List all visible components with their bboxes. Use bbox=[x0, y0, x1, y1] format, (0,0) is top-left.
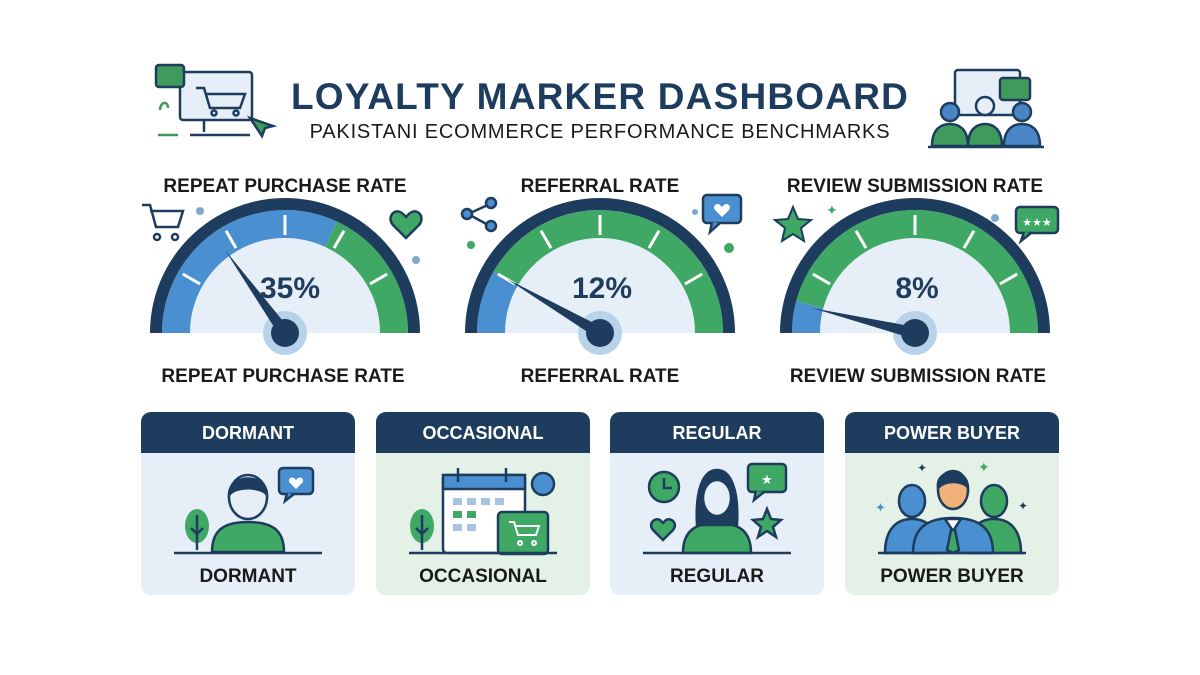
gauge 3: review submission rate: 8% bbox=[895, 272, 939, 305]
icon: star bbox=[775, 207, 811, 241]
gauge 2: referral rate: REFERRAL RATE bbox=[521, 176, 679, 197]
card: occasional: OCCASIONAL bbox=[419, 566, 547, 587]
gauge 1: repeat purchase rate: 35% bbox=[260, 272, 320, 305]
card: occasional: OCCASIONAL bbox=[422, 423, 544, 443]
card: power buyer: ✦ bbox=[875, 500, 886, 515]
icon: group with leader bbox=[878, 471, 1026, 553]
gauge 2: referral rate: 12% bbox=[572, 272, 632, 305]
card: regular: ★ bbox=[761, 472, 773, 487]
gauge 1: repeat purchase rate: REPEAT PURCHASE RATE bbox=[163, 176, 407, 197]
gauge 2: referral rate bbox=[462, 176, 741, 387]
icon: community people (header right) bbox=[928, 70, 1044, 147]
title: LOYALTY MARKER DASHBOARD bbox=[291, 76, 909, 117]
icon: share bbox=[462, 198, 496, 231]
gauge 3: review submission rate: ✦ bbox=[826, 202, 838, 218]
gauge 1: repeat purchase rate: REPEAT PURCHASE RATE bbox=[161, 366, 405, 387]
icon: calendar with cart bbox=[409, 468, 557, 554]
card: occasional bbox=[376, 412, 590, 595]
card: power buyer: ✦ bbox=[917, 461, 927, 475]
card: power buyer: ✦ bbox=[1018, 499, 1028, 513]
card: dormant: DORMANT bbox=[202, 423, 294, 443]
subtitle: PAKISTANI ECOMMERCE PERFORMANCE BENCHMARKS bbox=[310, 121, 890, 143]
card: regular bbox=[610, 412, 824, 595]
icon: cart bbox=[142, 205, 183, 240]
card: power buyer: POWER BUYER bbox=[884, 423, 1020, 443]
icon: heart bbox=[391, 211, 421, 238]
icon: rating bubble bbox=[1016, 207, 1058, 241]
card: power buyer: POWER BUYER bbox=[880, 566, 1024, 587]
card: power buyer: ✦ bbox=[978, 459, 990, 475]
card: regular: REGULAR bbox=[670, 566, 764, 587]
icon: heart bubble bbox=[703, 195, 741, 232]
gauge 3: review submission rate: REVIEW SUBMISSION RATE bbox=[790, 366, 1046, 387]
icon: rating bubble: ★★★ bbox=[1022, 217, 1052, 229]
card: power buyer bbox=[845, 412, 1059, 595]
icon: person with tree bbox=[174, 468, 322, 553]
gauge 1: repeat purchase rate bbox=[142, 176, 421, 387]
icon: computer with cart (header left) bbox=[156, 65, 273, 136]
gauge 2: referral rate: REFERRAL RATE bbox=[521, 366, 679, 387]
card: dormant bbox=[141, 412, 355, 595]
gauge 3: review submission rate: REVIEW SUBMISSION RATE bbox=[787, 176, 1043, 197]
card: dormant: DORMANT bbox=[199, 566, 297, 587]
gauge 3: review submission rate bbox=[775, 176, 1058, 387]
card: regular: REGULAR bbox=[672, 423, 762, 443]
icon: woman with clock, heart, star bbox=[643, 464, 791, 553]
